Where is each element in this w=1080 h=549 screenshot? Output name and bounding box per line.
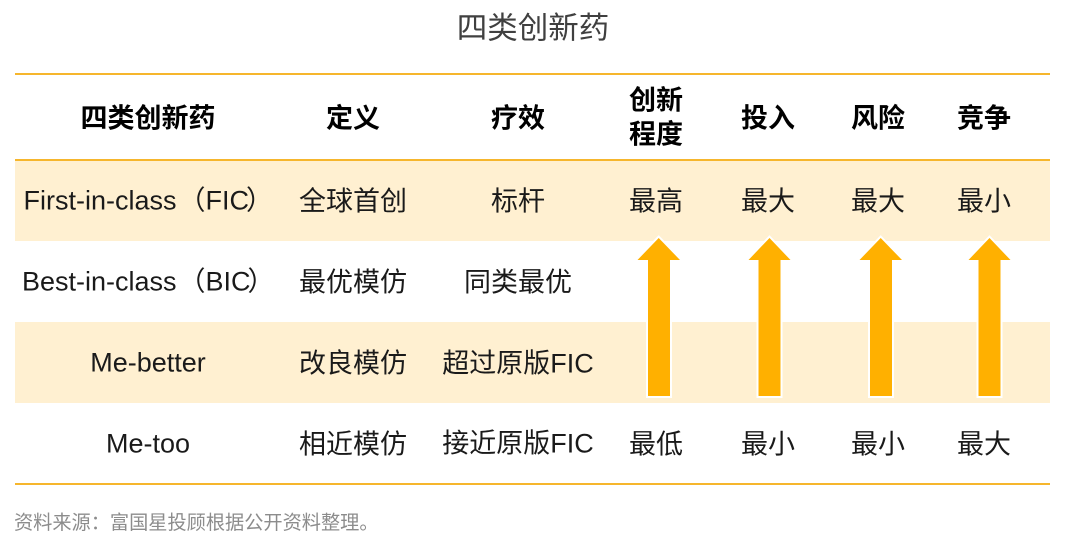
title: 四类创新药 (457, 11, 609, 45)
table (15, 73, 1050, 485)
arrow: competition (968, 238, 1010, 396)
header: 风险: 风险 (851, 103, 905, 133)
row 3: efficacy: 超过原版FIC (442, 348, 594, 378)
row 1: First-in-class name: First-in-class（FIC） (24, 186, 273, 216)
header: 投入: 投入 (741, 103, 795, 133)
row 1: investment: 最大 (741, 186, 795, 216)
header rule (15, 159, 1050, 161)
arrow: risk (860, 238, 902, 396)
row 4: innovation: 最低 (629, 429, 683, 459)
row 1: innovation: 最高 (629, 186, 683, 216)
top rule (15, 73, 1050, 75)
header: 竞争: 竞争 (957, 103, 1011, 133)
header: 疗效: 疗效 (491, 103, 545, 133)
row 4: definition: 相近模仿 (299, 429, 407, 459)
arrow: investment (748, 238, 790, 396)
header: 创新程度: 程度 (629, 119, 683, 149)
row 4: risk: 最小 (851, 429, 905, 459)
row 1: definition: 全球首创 (299, 186, 407, 216)
row band: Me-better (15, 322, 1050, 403)
row 1: risk: 最大 (851, 186, 905, 216)
header: 四类创新药: 四类创新药 (80, 103, 216, 133)
source note: 资料来源：富国星投顾根据公开资料整理。 (14, 513, 379, 534)
row 4: investment: 最小 (741, 429, 795, 459)
arrow: innovation (638, 238, 680, 396)
row 4: Me-too name: Me-too (106, 428, 190, 458)
header: 创新程度 (629, 86, 683, 149)
row 4: competition: 最大 (957, 429, 1011, 459)
row 4: efficacy: 接近原版FIC (442, 428, 594, 458)
row 1: efficacy: 标杆 (491, 186, 545, 216)
row 2: efficacy: 同类最优 (464, 268, 572, 298)
bottom rule (15, 483, 1050, 485)
row 3: definition: 改良模仿 (299, 348, 407, 378)
header: 定义: 定义 (326, 103, 380, 133)
row band: First-in-class (15, 160, 1050, 241)
row 1: competition: 最小 (957, 186, 1011, 216)
row 3: Me-better name: Me-better (90, 348, 206, 378)
row 2: Best-in-class name: Best-in-class（BIC） (22, 266, 275, 296)
header: 创新程度: 创新 (629, 86, 683, 116)
row 2: definition: 最优模仿 (299, 268, 407, 298)
